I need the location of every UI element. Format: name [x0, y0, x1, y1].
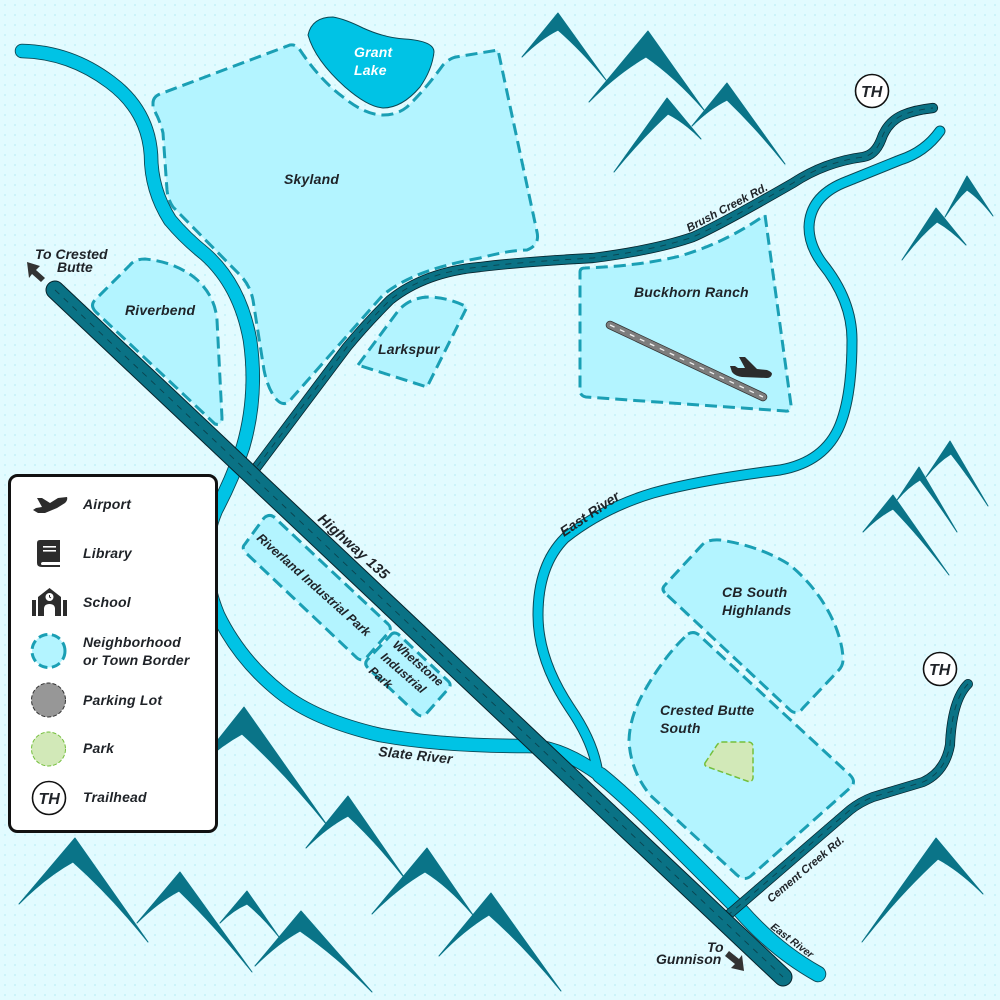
legend label: Neighborhood or Town Border: or Town Border [83, 652, 191, 668]
neighborhood: Larkspur [358, 297, 467, 387]
park [705, 742, 753, 782]
legend panel [10, 476, 216, 832]
legend icon: trailhead: TH [38, 791, 60, 808]
legend icon: parking lot [32, 683, 66, 717]
label: Grant Lake [354, 44, 393, 78]
label: East River lower: East River [768, 922, 816, 961]
legend icon: neighborhood border [32, 634, 65, 668]
label: To Gunnison: Gunnison [656, 951, 721, 967]
neighborhood: Buckhorn Ranch [580, 215, 791, 411]
road: Brush Creek Rd [250, 108, 933, 476]
label: CB South Highlands: Highlands [722, 602, 791, 618]
neighborhood: Riverbend [92, 259, 222, 424]
label: Whetstone Industrial Park: Park [366, 664, 396, 692]
label: Highway 135: Highway 135 [314, 511, 392, 584]
label: Whetstone Industrial Park: Whetstone [390, 638, 446, 689]
label: Whetstone Industrial Park [366, 638, 446, 697]
label: CB South Highlands [722, 584, 791, 618]
label: Slate River: Slate River [378, 743, 455, 767]
road: Highway 135 [55, 290, 783, 977]
label: Crested Butte South [660, 702, 754, 736]
label: To Crested Butte: To Crested [35, 246, 108, 262]
legend label: Library: Library [83, 545, 133, 561]
label: To Gunnison [656, 939, 724, 967]
icon: airplane on map [730, 357, 772, 378]
neighborhood: Riverland Industrial Park [243, 516, 390, 660]
label: Cement Creek Rd: Cement Creek Rd. [765, 834, 847, 905]
mountains: top right [902, 176, 993, 260]
label: Whetstone Industrial Park: Industrial [378, 650, 429, 697]
legend label: Airport: Airport [82, 496, 132, 512]
legend label: Parking Lot: Parking Lot [83, 692, 163, 708]
legend icon: park [32, 732, 66, 766]
label: Larkspur: Larkspur [378, 341, 441, 357]
runway [610, 325, 763, 397]
legend label: Neighborhood or Town Border [83, 634, 191, 668]
label: Grant Lake: Grant [354, 44, 393, 60]
legend icon: library [37, 540, 60, 567]
label: To Crested Butte: Butte [57, 259, 93, 275]
label: Skyland: Skyland [284, 171, 339, 187]
trailhead marker: south [924, 652, 956, 686]
trailhead marker: north [856, 74, 888, 108]
mountains: bottom left [19, 707, 561, 992]
trailhead marker: south: TH [929, 662, 951, 679]
neighborhood: CB South Highlands [663, 540, 843, 713]
mountains: top center [522, 13, 785, 172]
label: Crested Butte South: South [660, 720, 701, 736]
legend label: Trailhead: Trailhead [83, 789, 147, 805]
label: Buckhorn Ranch: Buckhorn Ranch [634, 284, 749, 300]
lake: Grant Lake [308, 17, 434, 108]
label: Grant Lake: Lake [354, 62, 387, 78]
label: To Crested Butte [35, 246, 108, 275]
mountain: bottom right [862, 838, 983, 942]
neighborhood: Crested Butte South [629, 633, 854, 878]
legend icon: airport [33, 497, 67, 513]
road: Cement Creek Rd [727, 684, 968, 916]
label: Brush Creek Rd: Brush Creek Rd. [685, 182, 770, 235]
arrow: to Gunnison [725, 951, 744, 971]
legend icon: school [32, 588, 67, 616]
neighborhood: Skyland [153, 45, 538, 404]
trailhead marker: north: TH [861, 84, 883, 101]
label: Riverland Industrial Park: Riverland Industrial Park [254, 531, 374, 640]
label: CB South Highlands: CB South [722, 584, 787, 600]
legend icon: trailhead [32, 782, 66, 814]
mountains: middle right [863, 441, 988, 575]
label: Crested Butte South: Crested Butte [660, 702, 754, 718]
arrow: to Crested Butte [27, 262, 45, 282]
legend label: Park: Park [83, 740, 115, 756]
label: Riverbend: Riverbend [125, 302, 196, 318]
neighborhood: Whetstone Industrial Park [366, 633, 450, 716]
legend label: School: School [83, 594, 132, 610]
legend label: Neighborhood or Town Border: Neighborhood [83, 634, 181, 650]
label: East River upper: East River [557, 487, 624, 539]
label: To Gunnison: To [707, 939, 724, 955]
